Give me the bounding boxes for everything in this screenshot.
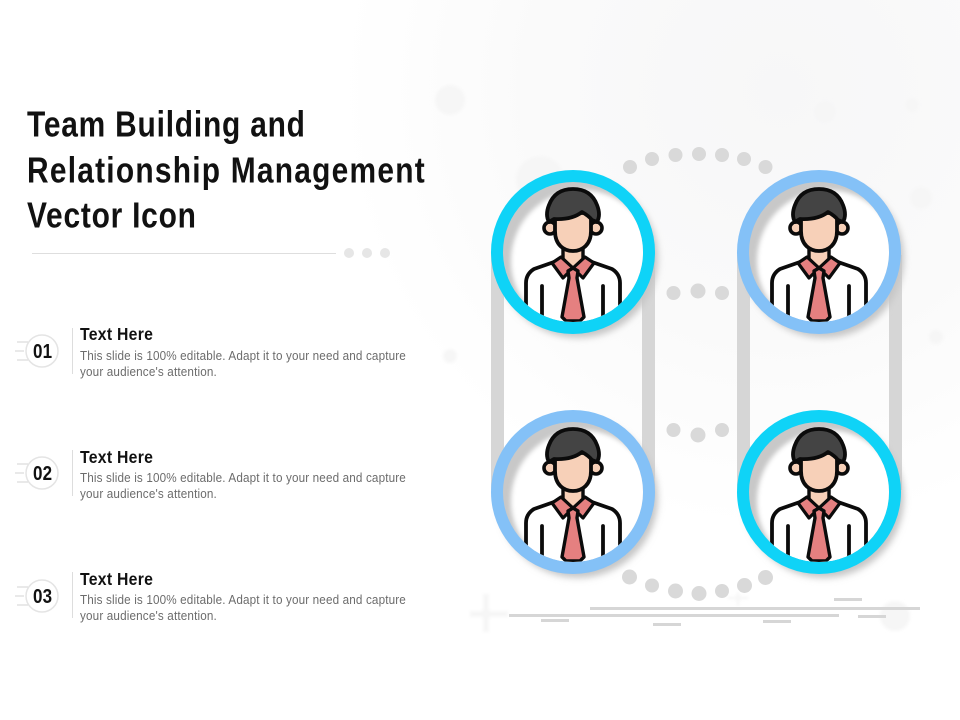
list item 03: This slide is 100% editable. Adapt it to your need and capture [80, 592, 406, 607]
number badge 03: 03 [33, 585, 52, 607]
title: Vector Icon [27, 196, 196, 236]
dotted arc: top [623, 147, 772, 174]
list item 01: Text Here [80, 324, 153, 344]
dots: upper middle [666, 284, 729, 300]
list item 01: your audience's attention. [80, 364, 217, 379]
number badge 01: 01 [33, 340, 52, 362]
list item 02 [15, 447, 406, 501]
number badge 03 [15, 580, 58, 612]
list item 01: This slide is 100% editable. Adapt it to your need and capture [80, 348, 406, 363]
person circle: bottom left [498, 416, 658, 578]
number badge 01 [15, 335, 58, 367]
list item 02: This slide is 100% editable. Adapt it to your need and capture [80, 470, 406, 485]
title: Relationship Management [27, 151, 425, 191]
dots: lower middle [666, 423, 729, 442]
person circle: top left [498, 176, 658, 338]
number badge 02: 02 [33, 462, 52, 484]
icon: businessman [526, 429, 620, 567]
title divider with dots [32, 248, 390, 258]
icon: businessman [772, 429, 866, 567]
number badge 02 [15, 457, 58, 489]
title [27, 105, 425, 236]
title: Team Building and [27, 105, 305, 145]
list item 03: your audience's attention. [80, 608, 217, 623]
person circle: top right [744, 176, 904, 338]
list item 03 [15, 569, 406, 623]
icon: businessman [772, 189, 866, 327]
list item 02: Text Here [80, 447, 153, 467]
list item 02: your audience's attention. [80, 486, 217, 501]
ground lines [509, 598, 920, 626]
person circle: bottom right [744, 416, 904, 578]
dotted arc: bottom [622, 570, 773, 601]
list item 01 [15, 324, 406, 379]
list item 03: Text Here [80, 569, 153, 589]
connector bars [491, 255, 902, 490]
icon: businessman [526, 189, 620, 327]
